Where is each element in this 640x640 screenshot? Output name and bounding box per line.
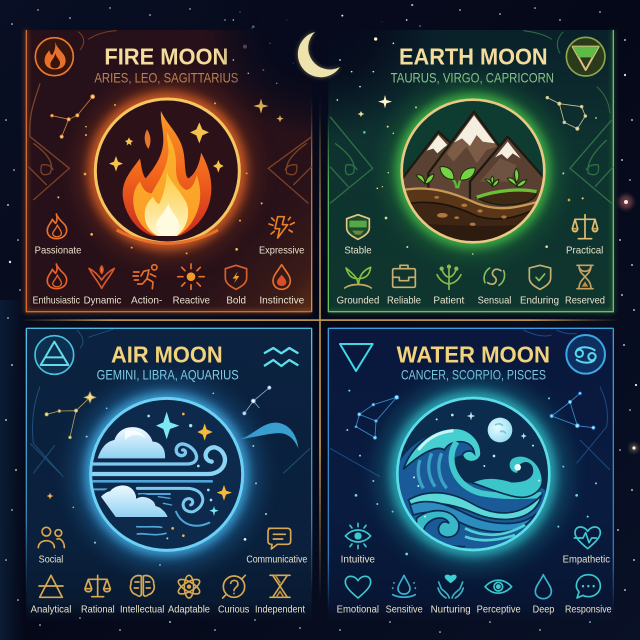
trait: adaptable [168,575,210,615]
trait: intuitive: Intuitive [341,554,375,565]
trait: empathetic: Empathetic [563,554,610,565]
trait: intellectual [120,576,164,615]
trait: social [38,527,64,565]
trait: sensual [478,268,511,306]
trait: analytical [31,575,71,615]
trait: enthusiastic: Enthusiastic [33,295,80,306]
trait: stable [344,215,372,256]
trait: responsive: Responsive [565,604,612,615]
stars: fire corner [232,19,294,84]
trait: empathetic [563,527,610,565]
element badge: air [35,336,74,374]
wind streams [93,444,225,535]
trait: independent: Independent [255,604,305,615]
corner fade: fire [202,0,428,137]
trait: action-oriented: Action- [131,295,162,306]
sparkles: water panel [346,390,597,555]
panel background: fire [26,30,312,312]
trait: emotional [337,576,379,615]
trait: social: Social [39,554,63,565]
trait: passionate [35,214,82,256]
panel frame: earth [328,30,613,312]
subtitle: fire signs: ARIES, LEO, SAGITTARIUS [94,69,238,85]
trait: dynamic: Dynamic [84,295,121,306]
trait: intellectual: Intellectual [120,604,164,615]
trait: sensitive [386,575,423,615]
soil [405,187,536,218]
panel frame: air [26,328,312,595]
trait: action-oriented [131,265,162,306]
panel frame: fire [26,30,312,312]
trait: expressive: Expressive [259,245,305,256]
right mountain [470,137,547,210]
right curl wave [472,456,542,497]
heading: water moon: WATER MOON [397,341,550,367]
constellation: air left [45,392,96,439]
trait: reserved: Reserved [565,295,605,306]
sparkles: air panel [47,392,267,566]
element badge: fire [35,38,73,76]
trait: nurturing [431,575,471,615]
trait: stable: Stable [344,245,372,256]
subtitle: earth signs: TAURUS, VIRGO, CAPRICORN [391,69,554,85]
trait: analytical: Analytical [31,604,71,615]
crescent moon [298,32,340,77]
trait: responsive [565,575,612,615]
trait: sensual: Sensual [478,295,511,306]
trait: dynamic [84,266,121,306]
panel background: earth [328,30,613,312]
emblem: fire circle [77,81,257,261]
trait: practical [566,215,603,256]
heading: fire moon: FIRE MOON [104,43,228,69]
constellation: earth right [546,96,587,130]
panel frame: water [328,328,614,612]
trait: rational: Rational [81,604,115,615]
trait: patient: Patient [433,295,464,306]
panel background: water [328,328,613,622]
trait: independent [255,575,305,615]
inner sparkles [156,412,179,439]
lower curl [415,511,465,550]
sparkles: earth panel [358,37,597,255]
element badge: earth [566,37,605,76]
constellation: water right [550,392,595,429]
upper cloud [98,427,165,458]
heading: air moon: AIR MOON [111,341,223,367]
lower cloud [99,484,169,518]
trait: perceptive [477,580,521,615]
trait: enthusiastic [33,264,80,306]
emblem: water circle [379,380,567,568]
icon: water triangle [340,344,373,371]
sprouts [416,167,527,188]
trait: nurturing: Nurturing [431,604,471,615]
stars: earth corner [336,4,413,101]
middle wave [408,493,542,519]
trait: curious [218,575,249,615]
trait: deep: Deep [533,604,555,615]
left mountain [403,130,450,188]
trait: enduring: Enduring [520,295,559,306]
subtitle: water signs: CANCER, SCORPIO, PISCES [401,366,546,382]
element badge: cancer [566,335,605,374]
trait: deep [533,575,555,615]
emblem: earth circle [386,84,560,258]
trait: reactive: Reactive [173,295,210,306]
trait: perceptive: Perceptive [477,604,521,615]
trait: grounded: Grounded [337,295,380,306]
trait: instinctive [259,265,305,306]
panel: fire moon [26,0,428,312]
trait: expressive [259,217,305,256]
trait: instinctive: Instinctive [259,295,305,306]
constellation: water left [355,395,399,439]
back wave body [398,436,545,549]
trait: enduring [520,265,559,306]
trait: reliable: Reliable [387,295,421,306]
trait: bold: Bold [226,295,246,306]
trait: reliable [387,265,421,306]
panel: earth moon [212,0,613,312]
trait: emotional: Emotional [337,604,379,615]
trait: bold [225,265,247,306]
trait: grounded [337,267,380,306]
corner fade: earth [212,0,438,137]
panel background: air [26,328,312,622]
trait: adaptable: Adaptable [168,604,210,615]
panel: water moon [328,328,614,622]
trait: practical: Practical [566,245,603,256]
heading: earth moon: EARTH MOON [399,43,548,69]
trait: sensitive: Sensitive [386,604,423,615]
trait: passionate: Passionate [35,245,82,256]
trait: reserved [565,265,605,306]
flame [123,111,211,236]
constellation: air right [243,386,271,415]
trait: curious: Curious [218,604,249,615]
trait: reactive [173,264,210,306]
constellation: fire left [51,95,95,138]
trait: patient [433,265,464,306]
gold cross divider [20,90,620,600]
subtitle: air signs: GEMINI, LIBRA, AQUARIUS [97,366,239,382]
icon: wind wing [240,423,298,448]
sparkles: fire panel [57,98,284,254]
central mountain [427,110,500,188]
trait: rational [81,575,115,615]
trait: intuitive [341,523,375,565]
trait: communicative [246,528,308,565]
trait: communicative: Communicative [246,554,308,565]
panel: air moon [26,328,312,622]
emblem: air circle [73,381,260,568]
icon: aquarius [264,348,298,366]
